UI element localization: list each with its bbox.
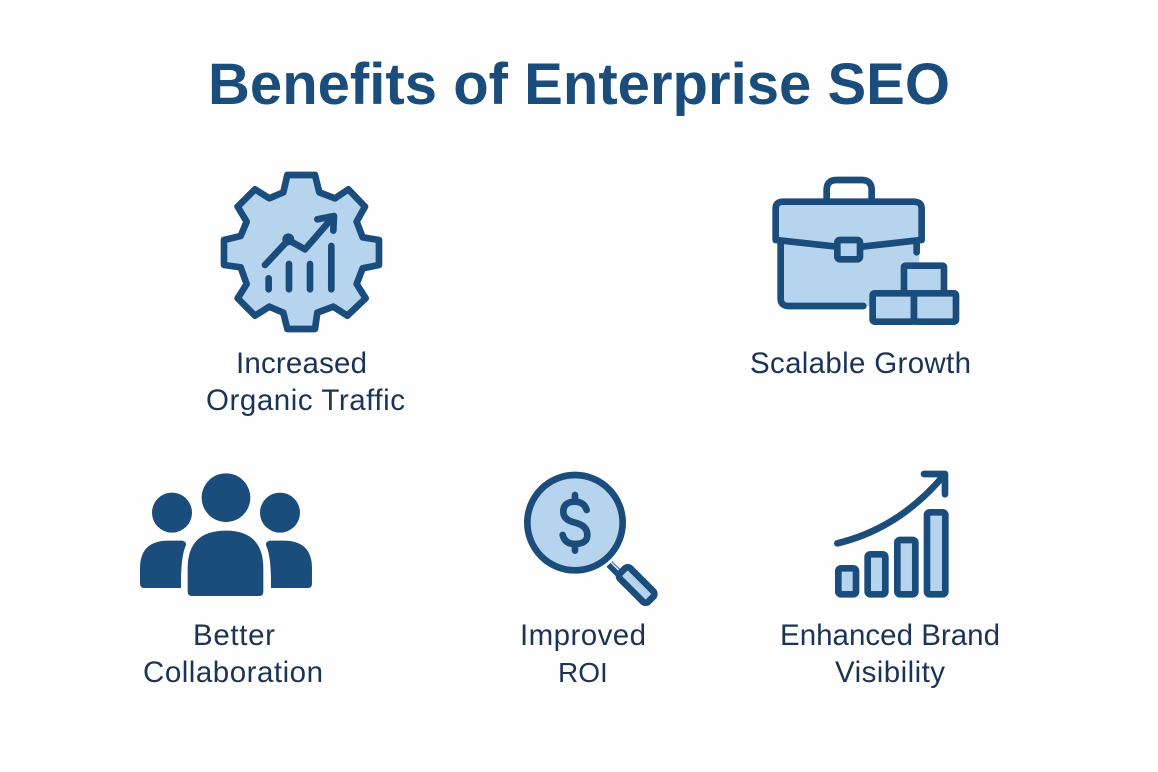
label: increased organic traffic: Increased [236, 347, 367, 380]
label: enhanced brand visibility [780, 619, 1000, 689]
panel: improved roi [520, 475, 656, 688]
label: enhanced brand visibility: Visibility [835, 656, 945, 689]
label: improved roi [520, 619, 646, 688]
label: scalable growth: Scalable Growth [750, 347, 971, 380]
label: improved roi: ROI [558, 657, 608, 688]
icon: briefcase with blocks [776, 180, 956, 322]
label: improved roi: Improved [520, 619, 646, 652]
label: better collaboration: Collaboration [143, 656, 323, 689]
panel: scalable growth [750, 180, 971, 380]
label: enhanced brand visibility: Enhanced Brand [780, 619, 1000, 652]
icon: three people [140, 473, 312, 596]
icon: gear with growth chart [224, 175, 379, 329]
panel: enhanced brand visibility [780, 474, 1000, 689]
label: better collaboration: Better [193, 619, 275, 652]
title: Benefits of Enterprise SEO [208, 52, 950, 117]
label: increased organic traffic [206, 347, 405, 417]
panel: increased organic traffic [206, 175, 405, 417]
panel: better collaboration [140, 473, 323, 689]
icon: magnifier with dollar sign [527, 475, 656, 604]
label: increased organic traffic: Organic Traffic [206, 384, 405, 417]
icon: bar chart with arrow [837, 474, 945, 594]
label: better collaboration [143, 619, 323, 689]
